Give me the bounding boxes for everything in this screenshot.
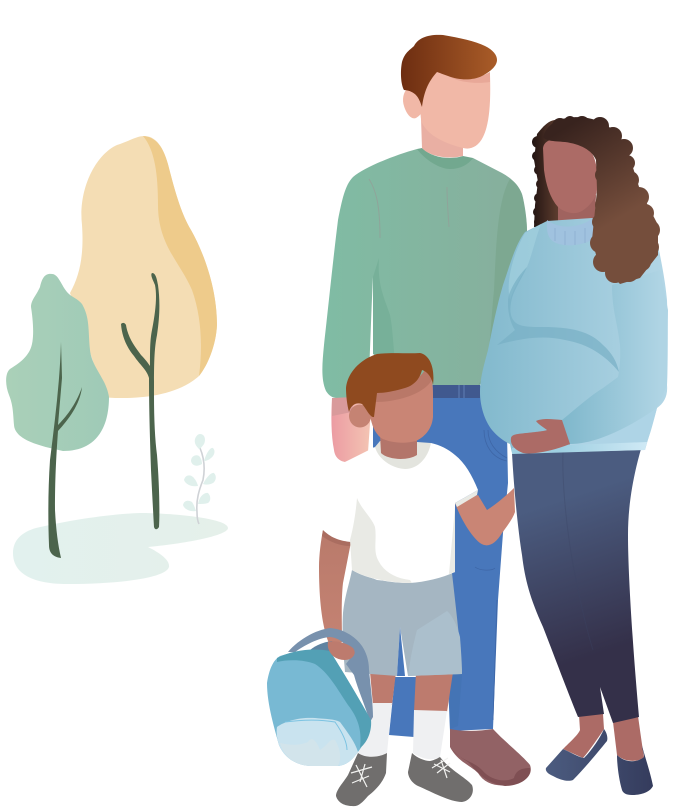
trunk: green tree bbox=[48, 342, 82, 558]
boy: left leg bbox=[370, 672, 396, 705]
tree: trunk of yellow tree bbox=[121, 273, 159, 529]
man bbox=[322, 35, 531, 786]
backpack bbox=[267, 628, 373, 766]
woman: left leg foot bbox=[563, 714, 604, 758]
boy: shorts bbox=[343, 570, 462, 676]
man: shoe bbox=[450, 729, 531, 786]
man: ear bbox=[403, 88, 424, 118]
woman: right leg foot bbox=[613, 716, 644, 761]
woman: hand bbox=[511, 419, 570, 453]
boy: right shoe bbox=[408, 753, 473, 802]
boy: right sock bbox=[413, 710, 447, 759]
woman: sweater bbox=[480, 218, 668, 454]
woman bbox=[480, 116, 668, 795]
boy: neck bbox=[380, 435, 417, 459]
man: hand bbox=[331, 395, 372, 462]
ground shadow bbox=[13, 513, 228, 584]
boy: left arm bbox=[319, 530, 351, 646]
plant sprig bbox=[183, 434, 216, 524]
woman: hair back bbox=[532, 120, 590, 230]
man: jeans bbox=[373, 385, 508, 731]
tree: green small bbox=[6, 274, 109, 558]
man: neck bbox=[421, 118, 463, 157]
man: far jeans leg bbox=[389, 677, 417, 737]
boy: face bbox=[370, 373, 433, 443]
tree: large yellow bbox=[70, 136, 217, 398]
man: sweater bbox=[322, 148, 527, 398]
boy: hair bbox=[346, 353, 433, 417]
backpack: back strap bbox=[310, 641, 338, 654]
woman: trousers bbox=[512, 449, 641, 723]
woman: face bbox=[543, 139, 597, 213]
boy: right leg bbox=[414, 672, 453, 712]
man: face bbox=[421, 70, 490, 149]
boy: left sock bbox=[358, 703, 392, 757]
boy: left shoe bbox=[336, 753, 387, 806]
man: belt bbox=[433, 385, 480, 398]
woman: turtleneck bbox=[547, 218, 593, 245]
woman: hair front bbox=[543, 116, 660, 284]
boy bbox=[319, 353, 515, 806]
woman: right shoe bbox=[617, 746, 653, 795]
woman: left shoe bbox=[546, 729, 607, 781]
boy: hairline shade bbox=[374, 370, 433, 402]
boy: right arm bbox=[455, 488, 515, 545]
backpack: pocket bbox=[277, 718, 358, 766]
man: hair bbox=[401, 35, 497, 107]
boy: t-shirt bbox=[323, 441, 478, 583]
woman: neck bbox=[558, 195, 596, 227]
boy: ear bbox=[349, 404, 371, 428]
backpack: strap bbox=[288, 628, 373, 722]
boy: hand on strap bbox=[328, 641, 355, 660]
backpack: side band bbox=[277, 649, 371, 748]
backpack: body bbox=[267, 651, 370, 766]
